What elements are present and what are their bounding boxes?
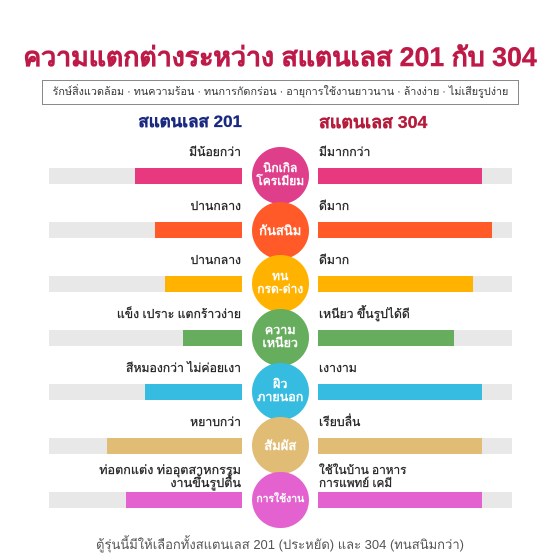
bar 201 <box>49 438 242 454</box>
label 201: หยาบกว่า <box>190 415 241 429</box>
label 201: งานขึ้นรูปตื้น <box>170 476 241 490</box>
label 304: ดีมาก <box>319 253 349 267</box>
circle: ทน <box>272 269 288 283</box>
bar 201 <box>49 276 242 292</box>
row: toughness <box>49 305 512 364</box>
label 201: ท่อตกแต่ง ท่ออุตสาหกรรม <box>99 463 241 477</box>
bar 201 <box>49 222 242 238</box>
circle: เหนียว <box>263 336 298 350</box>
circle: กันสนิม <box>259 222 301 238</box>
bar 304 <box>318 276 512 292</box>
label 201: สีหมองกว่า ไม่ค่อยเงา <box>126 361 241 375</box>
circle <box>252 202 308 258</box>
label 304: ใช้ในบ้าน อาหาร <box>319 463 406 477</box>
bar 201 <box>49 384 242 400</box>
circle: กรด-ด่าง <box>257 282 303 296</box>
circle: สัมผัส <box>264 438 296 452</box>
row: nickel chromium <box>49 145 512 203</box>
label 304 <box>319 463 406 490</box>
footer note: ตู้รุ่นนี้มีให้เลือกทั้งสแตนเลส 201 (ประหยัด) และ 304 (ทนสนิมกว่า) <box>96 537 464 552</box>
circle <box>252 417 308 474</box>
circle: ภายนอก <box>257 390 303 404</box>
circle <box>252 363 308 420</box>
benefits box: รักษ์สิ่งแวดล้อม · ทนความร้อน · ทนการกัดกร่อน · อายุการใช้งานยาวนาน · ล้างง่าย · ไม่เสียรูปง่าย <box>53 86 508 98</box>
circle: โครเมียม <box>256 174 304 188</box>
circle: ผิว <box>273 377 287 391</box>
row: surface <box>49 360 512 418</box>
bar 201 <box>49 330 242 346</box>
label 201: แข็ง เปราะ แตกร้าวง่าย <box>117 307 241 321</box>
label 304: เงางาม <box>319 361 357 375</box>
benefits box <box>42 80 519 105</box>
label 201: ปานกลาง <box>190 253 241 267</box>
bar 201 <box>49 168 242 184</box>
bar 304 <box>318 222 512 238</box>
label 201 <box>99 463 241 491</box>
label 304: มีมากกว่า <box>319 145 370 159</box>
label 201: มีน้อยกว่า <box>189 145 241 159</box>
label 304: การแพทย์ เคมี <box>319 476 392 490</box>
bar 304 <box>318 168 512 184</box>
circle: ความ <box>265 323 296 337</box>
label 304: เรียบลื่น <box>319 415 360 429</box>
row: acid alkali resistance <box>49 253 512 310</box>
circle: นิกเกิล <box>263 161 297 175</box>
circle <box>252 255 308 312</box>
right column heading: สแตนเลส 304 <box>319 112 427 132</box>
title: ความแตกต่างระหว่าง สแตนเลส 201 กับ 304 <box>23 42 537 72</box>
circle <box>252 147 308 204</box>
bar 304 <box>318 492 512 508</box>
bar 304 <box>318 438 512 454</box>
row: touch <box>49 413 512 473</box>
label 201: ปานกลาง <box>190 199 241 213</box>
circle <box>252 472 308 528</box>
bar 201 <box>49 492 242 508</box>
row: rust resistance <box>49 199 512 257</box>
circle: การใช้งาน <box>256 494 304 505</box>
label 304: ดีมาก <box>319 199 349 213</box>
circle <box>252 309 308 366</box>
left column heading: สแตนเลส 201 <box>138 112 242 131</box>
bar 304 <box>318 384 512 400</box>
row: usage <box>49 463 512 528</box>
bar 304 <box>318 330 512 346</box>
label 304: เหนียว ขึ้นรูปได้ดี <box>319 307 410 321</box>
